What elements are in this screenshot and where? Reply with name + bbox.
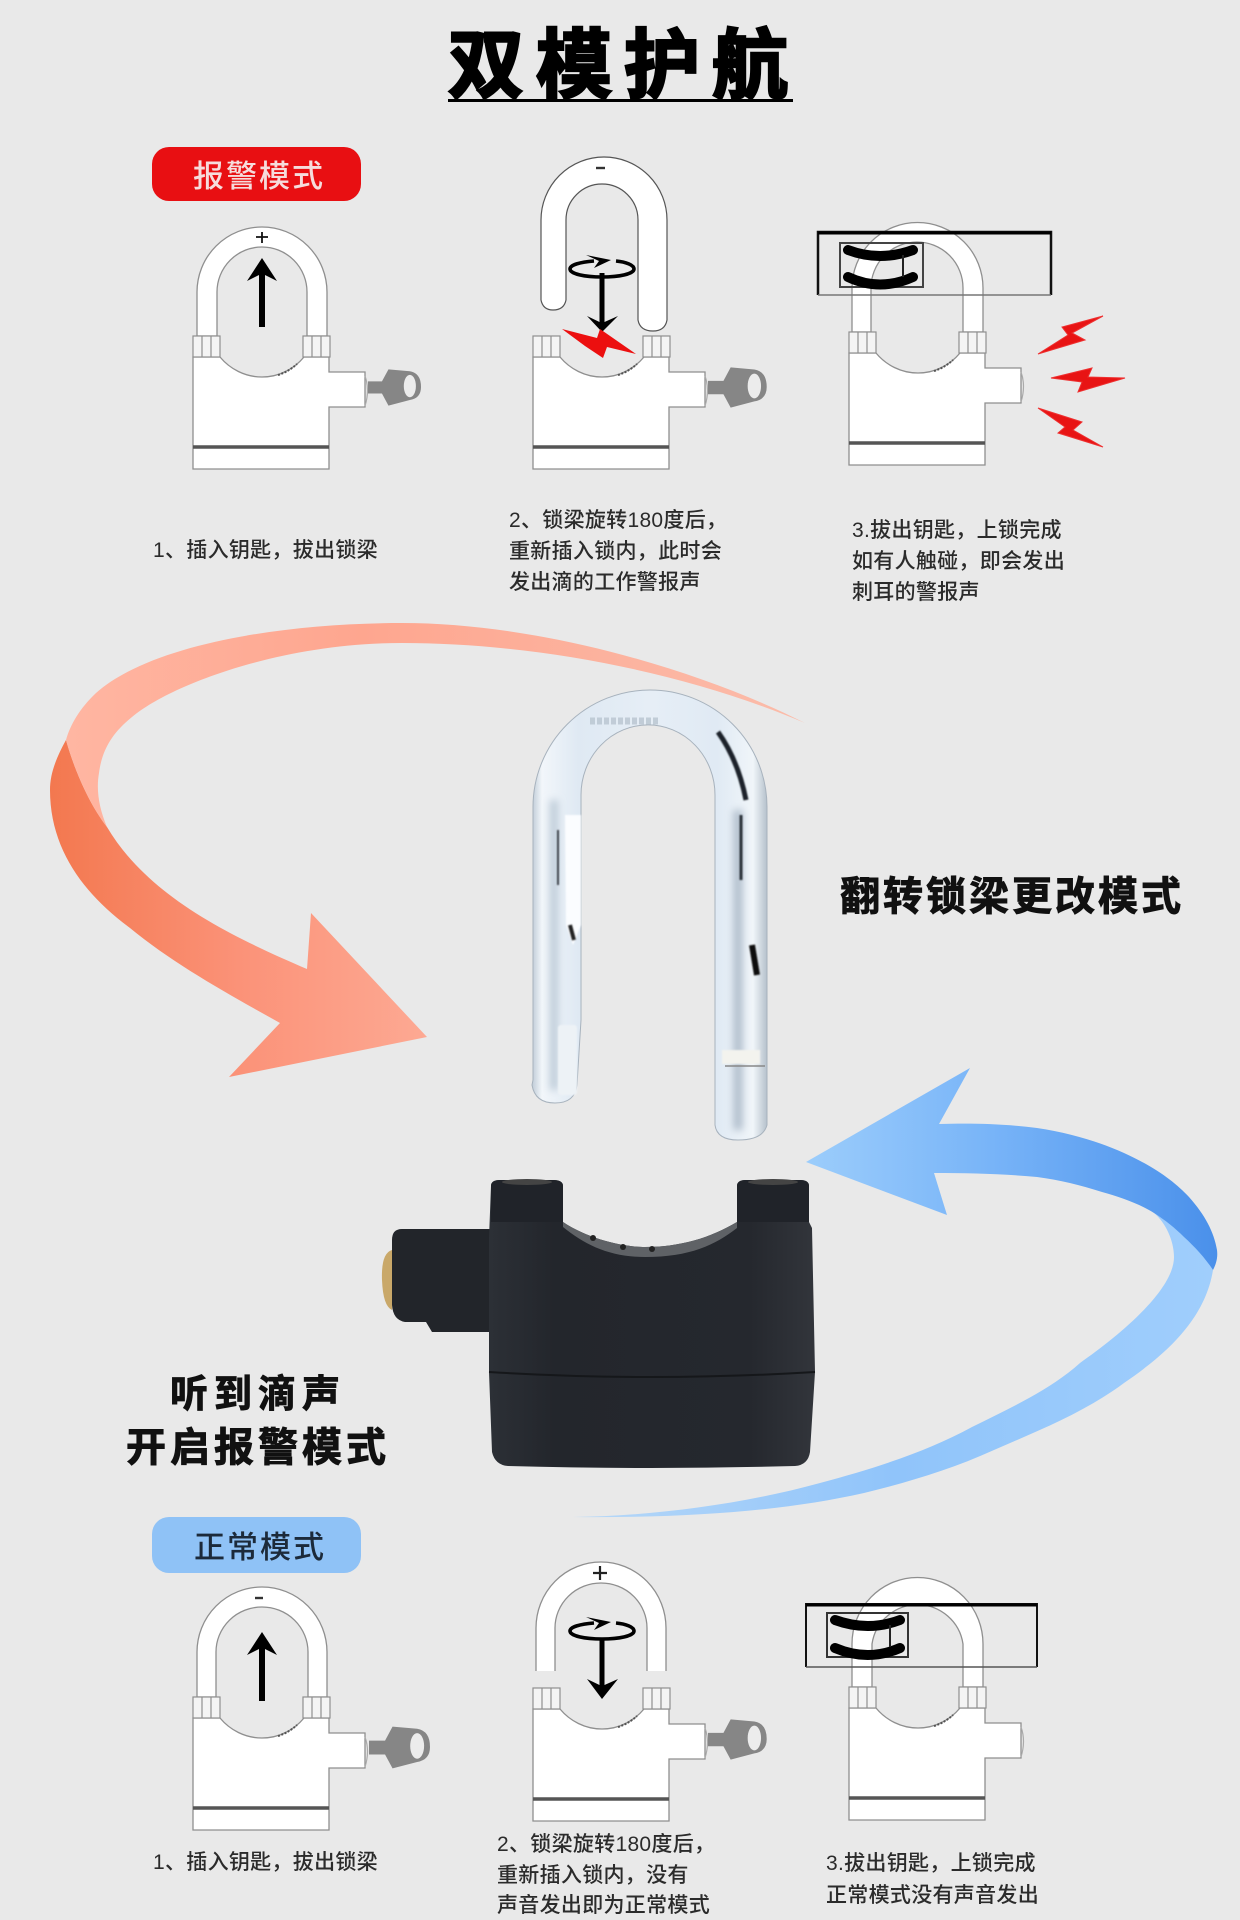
black lock body (382, 1179, 815, 1468)
alarm step 3 diagram (818, 222, 1125, 465)
normal step 3 text: 3.拔出钥匙，上锁完成 (826, 1852, 1036, 1875)
badge: normal mode: 正常模式 (194, 1530, 326, 1565)
alarm step 3 text: 刺耳的警报声 (852, 581, 980, 604)
alarm step 2 diagram (533, 157, 767, 469)
alarm step 3 text: 如有人触碰，即会发出 (852, 550, 1065, 573)
normal step 2 diagram (533, 1562, 767, 1821)
title: 双模护航 (448, 24, 800, 109)
normal step 3 text (826, 1852, 1039, 1907)
chrome shackle (532, 690, 767, 1140)
normal step 2 text: 2、锁梁旋转180度后， (497, 1833, 715, 1856)
alarm step 2 text (509, 509, 727, 594)
normal step 3 text: 正常模式没有声音发出 (826, 1884, 1039, 1907)
alarm step 2 text: 发出滴的工作警报声 (509, 571, 701, 594)
normal step 2 text: 重新插入锁内，没有 (497, 1864, 689, 1887)
mode change caption: 翻转锁梁更改模式 (840, 875, 1184, 919)
arrow: blue curved (573, 1068, 1217, 1517)
alarm step 1 text: 1、插入钥匙，拔出锁梁 (153, 539, 378, 562)
caption: hear the beep: 开启报警模式 (126, 1426, 390, 1470)
badge: normal mode (152, 1517, 361, 1573)
normal step 1 diagram (193, 1587, 430, 1830)
alarm step 1 diagram (193, 227, 421, 469)
arrow: red curved (50, 623, 805, 1077)
alarm step 2 text: 重新插入锁内，此时会 (509, 540, 722, 563)
normal step 2 text (497, 1833, 715, 1917)
alarm step 3 text: 3.拔出钥匙，上锁完成 (852, 519, 1062, 542)
alarm step 2 text: 2、锁梁旋转180度后， (509, 509, 727, 532)
badge: alarm mode (152, 147, 361, 201)
normal step 2 text: 声音发出即为正常模式 (497, 1894, 710, 1917)
caption: hear the beep (126, 1374, 390, 1470)
alarm step 3 text (852, 519, 1065, 604)
normal step 3 diagram (806, 1577, 1037, 1820)
normal step 1 text: 1、插入钥匙，拔出锁梁 (153, 1851, 378, 1874)
caption: hear the beep: 听到滴声 (170, 1374, 346, 1416)
badge: alarm mode: 报警模式 (193, 159, 325, 194)
